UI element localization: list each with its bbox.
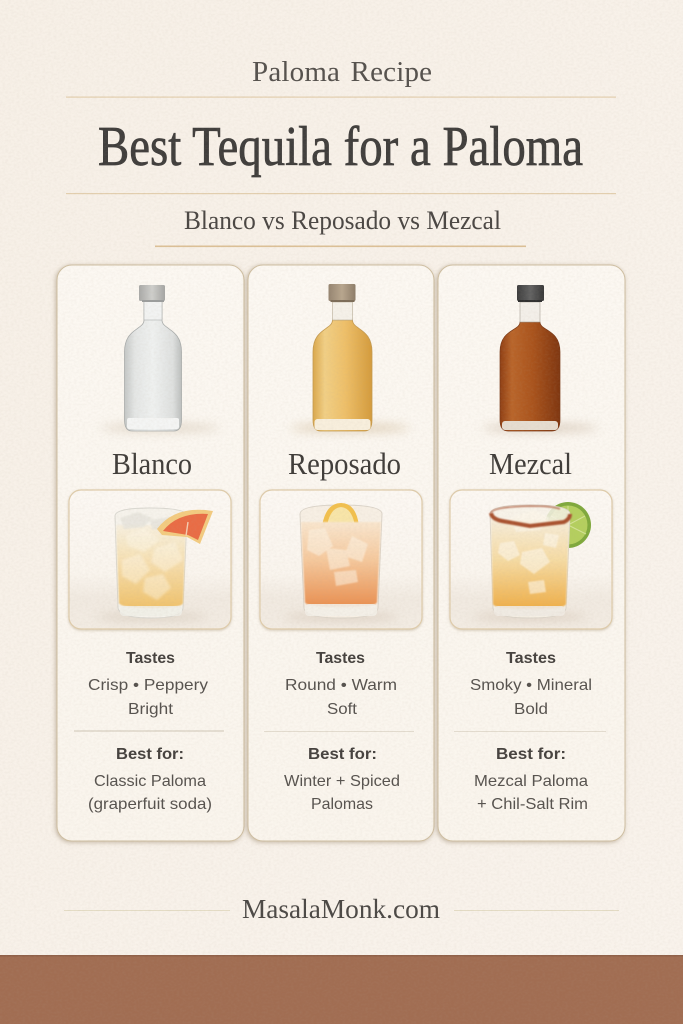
image frame: Mezcal drink: [450, 490, 612, 629]
subtitle: Blanco vs Reposado vs Mezcal: [184, 205, 501, 235]
bottom band: [0, 955, 683, 1024]
card background: Blanco: [57, 265, 244, 841]
footer: MasalaMonk.com: MasalaMonk.com: [242, 894, 440, 924]
icon: paloma glass with lemon: [300, 503, 382, 618]
eyebrow: Paloma Recipe: Paloma Recipe: [252, 56, 432, 88]
icon: mezcal paloma glass with chili-salt rim: [490, 505, 570, 618]
image frame: Reposado drink: [260, 490, 422, 629]
image frame: Blanco drink: [69, 490, 231, 629]
block: Best for: Best for:: [116, 746, 184, 763]
block: Tastes: Smoky • Mineral: [470, 677, 592, 694]
block: Best for: [474, 746, 588, 813]
panel: Reposado: [248, 265, 434, 841]
block: Tastes: Tastes: [506, 650, 556, 667]
heading: Blanco: Blanco: [112, 446, 192, 481]
block: Tastes: Bold: [514, 701, 548, 718]
block: Tastes: [470, 650, 592, 718]
card background: Reposado: [248, 265, 434, 841]
block: Tastes: Tastes: [126, 650, 175, 667]
title: Best Tequila for a Paloma: [98, 116, 583, 178]
block: Best for: Mezcal Paloma: [474, 773, 588, 790]
block: Best for: Classic Paloma: [94, 773, 206, 790]
icon: Mezcal bottle: [482, 285, 598, 432]
block: Best for: + Chil-Salt Rim: [477, 796, 588, 813]
block: Best for: Winter + Spiced: [284, 773, 400, 790]
block: Tastes: Tastes: [316, 650, 365, 667]
block: Best for: (graperfuit soda): [88, 796, 212, 813]
block: Tastes: Crisp • Peppery: [88, 677, 208, 694]
icon: paloma glass with grapefruit: [115, 508, 187, 618]
heading: Mezcal: Mezcal: [489, 446, 572, 481]
block: Tastes: [285, 650, 397, 718]
icon: grapefruit wedge: [157, 510, 213, 544]
block: Tastes: Soft: [327, 701, 358, 718]
block: Tastes: Bright: [128, 701, 174, 718]
block: Best for: [284, 746, 400, 813]
card background: Mezcal: [438, 265, 625, 841]
block: Best for: Best for:: [496, 746, 566, 763]
icon: Blanco bottle: [100, 285, 220, 432]
block: Best for: [88, 746, 212, 813]
heading: Reposado: Reposado: [288, 446, 401, 481]
panel: Blanco: [57, 265, 244, 841]
icon: Reposado bottle: [290, 284, 410, 432]
block: Best for: Best for:: [308, 746, 377, 763]
block: Tastes: Round • Warm: [285, 677, 397, 694]
panel: Mezcal: [438, 265, 625, 841]
block: Best for: Palomas: [311, 796, 373, 813]
block: Tastes: [88, 650, 208, 718]
icon: lime wheel: [545, 502, 591, 548]
